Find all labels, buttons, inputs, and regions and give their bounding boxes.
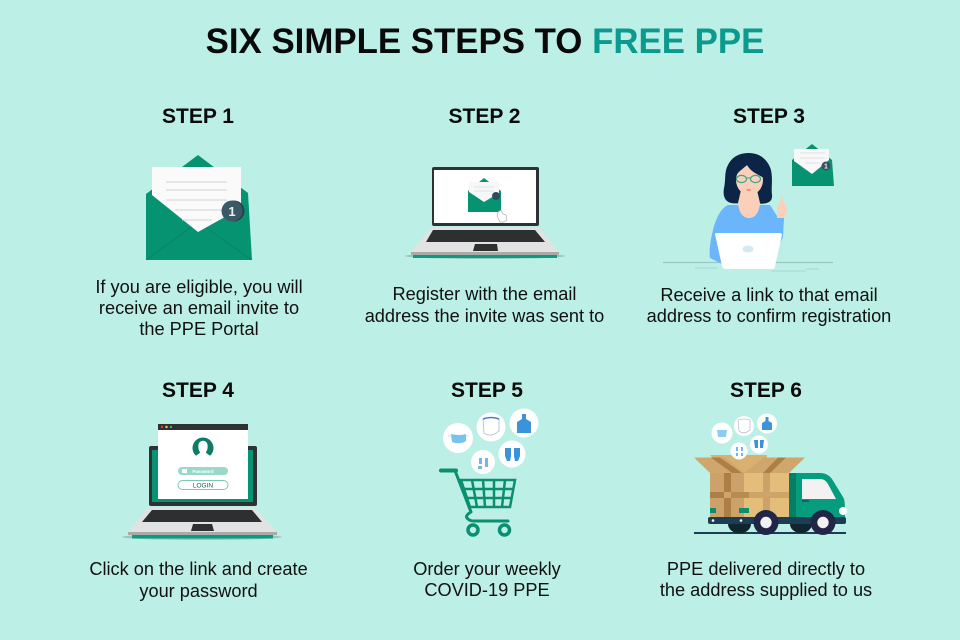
panel: step 6 (660, 379, 872, 600)
description: step 2: Register with the email (393, 284, 576, 304)
heading: step 1: STEP 1 (162, 105, 234, 128)
heading: step 6: STEP 6 (730, 379, 802, 402)
title: SIX SIMPLE STEPS TO FREE PPE (206, 22, 764, 61)
description: step 6: PPE delivered directly to (667, 559, 865, 579)
heading: step 5: STEP 5 (451, 379, 523, 402)
panel: step 1 (95, 105, 303, 339)
description: step 4: Click on the link and create (89, 559, 308, 579)
icon: open envelope with notification (146, 155, 252, 260)
icon: laptop with login window (122, 424, 282, 540)
description: step 3: address to confirm registration (647, 306, 891, 326)
description: step 5: Order your weekly (413, 559, 562, 579)
icon: open envelope with notification: 1 (228, 204, 236, 219)
heading: step 3: STEP 3 (733, 105, 805, 128)
icon: woman at laptop receiving email (663, 144, 834, 271)
description: step 1: receive an email invite to (99, 298, 299, 318)
panel: step 2 (365, 105, 604, 326)
icon: shopping cart with PPE items (441, 408, 538, 535)
description: step 5: COVID-19 PPE (424, 580, 550, 600)
icon: laptop with login window: Password (192, 469, 214, 474)
icon: delivery truck with PPE box (694, 414, 847, 535)
description: step 1: the PPE Portal (139, 319, 259, 339)
heading: step 2: STEP 2 (449, 105, 520, 128)
icon: laptop with login window: LOGIN (193, 482, 213, 490)
panel: step 5 (413, 379, 562, 600)
icon: woman at laptop receiving email: 1 (824, 164, 828, 170)
description: step 1: If you are eligible, you will (95, 277, 303, 297)
icon: laptop with email (405, 167, 565, 259)
description: step 6: the address supplied to us (660, 580, 872, 600)
heading: step 4: STEP 4 (162, 379, 234, 402)
panel: step 3 (647, 105, 891, 326)
description: step 2: address the invite was sent to (365, 306, 604, 326)
description: step 4: your password (139, 581, 258, 601)
description: step 3: Receive a link to that email (660, 285, 878, 305)
panel: step 4 (89, 379, 308, 601)
